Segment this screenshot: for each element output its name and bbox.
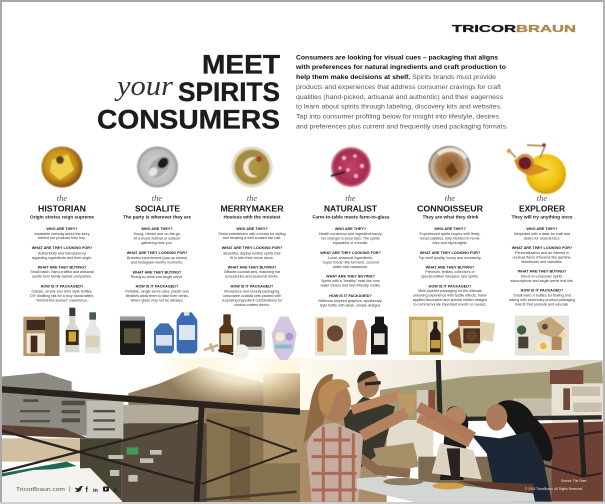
- profile text: WHAT ARE THEY LOOKING FOR?: [32, 246, 93, 250]
- profile text: flexibles allow them to take their drinks: [126, 294, 188, 298]
- icon: cocktail with ice: [428, 146, 470, 188]
- photo credit: Source: The Flare: [561, 479, 587, 483]
- product images: [204, 314, 297, 360]
- footer: website and social links: TricorBraun.com: [16, 487, 65, 493]
- profile text: Classic, ornate and retro style bottles.: [32, 289, 92, 293]
- right woman: [418, 400, 553, 502]
- profile text: WHAT ARE THEY BUYING?: [326, 274, 376, 278]
- profile text: HOW IS IT PACKAGED?: [429, 284, 472, 288]
- profile text: WHO ARE THEY?: [141, 227, 173, 231]
- panel: the naturalist: the: [345, 193, 356, 203]
- profile text: water and cardamom.: [333, 265, 368, 269]
- profile text: Insatiable curiosity about the story: [34, 232, 90, 236]
- profile text: WHAT ARE THEY LOOKING FOR?: [320, 251, 381, 255]
- profile text: WHO ARE THEY?: [526, 227, 558, 231]
- panel: the explorer: They will try anything once: [512, 214, 573, 220]
- panel: the naturalist: [312, 147, 390, 356]
- panel: the connoisseur: They are what they drink: [422, 214, 479, 220]
- profile text: WHAT ARE THEY BUYING?: [518, 270, 567, 274]
- icon: whisky swirl: [42, 146, 82, 188]
- profile text: WHAT ARE THEY BUYING?: [228, 266, 277, 270]
- profile text: accessories and seasonal drinks.: [225, 274, 279, 278]
- profile text: WHAT ARE THEY BUYING?: [426, 266, 475, 270]
- panel: the explorer: [507, 143, 575, 356]
- product images: [515, 316, 569, 356]
- profile text: Experienced spirits buyers with finely-: [420, 232, 481, 236]
- profile text: surprising ingredient combinations for: [222, 298, 283, 302]
- profile text: gathering near you.: [141, 241, 173, 245]
- profile text: Serial entertainers with a knack for styling: [218, 232, 286, 236]
- right frame edge: [603, 0, 605, 504]
- panel: the historian: the: [57, 193, 67, 203]
- profile text: equivalent of a foodie.: [333, 241, 368, 245]
- profile text: WHO ARE THEY?: [335, 227, 367, 231]
- product images: [409, 317, 495, 355]
- bottom frame edge: [0, 502, 605, 504]
- profile text: and stocking a well-curated bar cart.: [223, 236, 281, 240]
- title: SPIRITS: [178, 77, 280, 107]
- panel: the socialite: the: [152, 193, 162, 203]
- icon: youtube: [103, 486, 109, 492]
- panel: the connoisseur: CONNOISSEUR: [417, 204, 484, 214]
- intro paragraph: [295, 54, 508, 130]
- profile text: WHAT ARE THEY BUYING?: [133, 270, 182, 274]
- panel: the merrymaker: [204, 146, 297, 360]
- profile text: DIY distilling kits for a truly handcrafted,: [30, 294, 94, 298]
- intro paragraph: Tap into consumer profiling below for insight into lifestyle, desires: [296, 114, 500, 120]
- profile text: HOW IS IT PACKAGED?: [41, 284, 84, 288]
- left woman: [303, 374, 333, 443]
- panel: the naturalist: NATURALIST: [324, 204, 378, 214]
- panel: the merrymaker: MERRYMAKER: [220, 204, 284, 214]
- title: CONSUMERS: [97, 104, 280, 134]
- profile text: and Instagram-worthy moments.: [131, 260, 183, 264]
- profile text: where glass may not be allowed.: [131, 298, 183, 302]
- title: your: [114, 70, 174, 102]
- panel: the historian: Origin stories reign supreme: [30, 214, 95, 220]
- icon: cocktail from above: [232, 146, 272, 188]
- panel: the connoisseur: [409, 146, 495, 355]
- panel: the socialite: SOCIALITE: [135, 204, 180, 214]
- right side scene: [300, 360, 605, 503]
- profile text: regarding ingredients and their origin.: [32, 256, 92, 260]
- middle woman: [418, 406, 482, 480]
- photo credit: © 2018 TricorBraun. All Rights Reserved.: [525, 487, 583, 491]
- intro paragraph: products and experiences that address consumer cravings for craft: [296, 84, 501, 91]
- profile text: unboxable cocktail sets packed with: [223, 294, 281, 298]
- footer: website and social links: [16, 486, 118, 494]
- profile text: No stranger to juice bars. The spirits: [321, 236, 380, 240]
- panel: the explorer: the: [537, 193, 547, 203]
- profile text: HOW IS IT PACKAGED?: [136, 284, 179, 288]
- profile text: Direct-to-consumer spirits': [521, 274, 563, 278]
- profile text: Spirits with a "healthy" twist like rose: [321, 279, 380, 283]
- profile text: water mixers and liver-friendly vodka.: [320, 284, 381, 288]
- profile text: style bottle with sleek, simple designs.: [320, 304, 381, 308]
- profile text: tuned palettes, fully-stocked in-home: [420, 236, 480, 240]
- profile text: Giftable cocktail sets, matching bar: [224, 270, 281, 274]
- profile text: Multi-layered packaging for the ultimate: [418, 289, 482, 293]
- profile text: Premium, limited, collector's or: [425, 270, 476, 274]
- profile text: Branded experiences (pop-up stores): [127, 256, 187, 260]
- profile text: [509, 227, 575, 306]
- profile text: to commemorate important events or causes.: [413, 302, 487, 306]
- profile text: WHAT ARE THEY LOOKING FOR?: [127, 251, 188, 255]
- profile text: bars and big budgets.: [432, 241, 468, 245]
- profile text: WHO ARE THEY?: [434, 227, 466, 231]
- profile text: Ready-to-drink and single serve.: [131, 275, 183, 279]
- profile text: WHAT ARE THEY LOOKING FOR?: [222, 246, 283, 250]
- profile text: Beautiful, display-worthy spirits that: [223, 252, 281, 256]
- intro paragraph: Consumers are looking for visual cues – packaging that aligns: [296, 54, 498, 61]
- sun glow: [167, 358, 322, 405]
- profile text: custom-crafted drinks.: [234, 303, 270, 307]
- profile text: [218, 227, 286, 307]
- intro paragraph: help them make decisions at shelf. Spirits brands must provide: [296, 74, 496, 81]
- railing: [2, 389, 300, 502]
- profile text: WHAT ARE THEY LOOKING FOR?: [420, 251, 481, 255]
- icon: facebook: f: [86, 487, 88, 494]
- panel: the historian: [23, 146, 101, 356]
- profile text: Top shelf quality, luxury and exclusivity.: [418, 256, 482, 260]
- panel: the merrymaker: the: [247, 193, 257, 203]
- profile text: Small vials or bottles for trialing and: [513, 294, 571, 298]
- profile text: applied decoration and special edition designs: [413, 298, 487, 302]
- profile text: WHO ARE THEY?: [236, 227, 268, 231]
- profile text: inserts that promote and educate.: [515, 302, 569, 306]
- profile text: special edition releases; rare spirits.: [421, 274, 479, 278]
- product images: [315, 317, 388, 356]
- icon: drink garnished with cherry: [507, 143, 566, 194]
- profile text: spirits from family-owned companies.: [32, 274, 92, 278]
- profile text: HOW IS IT PACKAGED?: [231, 284, 274, 288]
- intro paragraph: with preferences for natural ingredients and craft production to: [295, 64, 506, 71]
- product images: [120, 312, 197, 355]
- sky fade: [192, 366, 207, 370]
- profile text: WHAT ARE THEY BUYING?: [38, 266, 87, 270]
- photo: friends toasting on a rooftop: [2, 358, 603, 502]
- profile text: fit in with their home decor.: [230, 256, 274, 260]
- profile text: Health-conscious and ingredient-savvy.: [319, 232, 382, 236]
- logo: TricorBraun: [452, 23, 576, 35]
- panel: the socialite: [120, 146, 197, 355]
- profile text: WHAT ARE THEY LOOKING FOR?: [512, 246, 573, 250]
- icon: drink can top: [137, 146, 178, 188]
- profile text: mixing with secondary product packaging: [509, 298, 575, 302]
- title: [97, 50, 281, 134]
- product images: [23, 308, 101, 356]
- profile text: Local, seasonal ingredients,: [328, 256, 373, 260]
- profile text: Authenticity and transparency: [38, 252, 86, 256]
- profile text: Young, vibrant and on-the-go.: [133, 232, 181, 236]
- intro paragraph: and preferences plus current and frequently used packaging formats.: [296, 123, 508, 130]
- profile text: HOW IS IT PACKAGED?: [329, 294, 373, 298]
- roof with footer space: [0, 468, 122, 502]
- intro paragraph: to learn about spirits through labeling, discovery kits and websites.: [296, 104, 502, 110]
- profile text: behind the products they buy.: [38, 236, 86, 240]
- icon: twitter: [75, 486, 83, 492]
- profile text: Wellness-inspired graphics, apothecary-: [318, 299, 384, 303]
- icon: google plus: G: [114, 488, 118, 494]
- profile text: [30, 227, 94, 302]
- profile text: unusual flavor infusions like jasmine,: [512, 256, 572, 260]
- logo: TricorBraun: TRICOR: [452, 23, 517, 35]
- glasses: [397, 393, 417, 415]
- city view left: [2, 367, 303, 503]
- panel: the connoisseur: the: [445, 193, 455, 203]
- profile text: Personalization and an interest in: [515, 251, 569, 255]
- profile text: [125, 227, 189, 302]
- panel: the historian: HISTORIAN: [38, 204, 86, 214]
- table: [357, 477, 535, 503]
- logo: TricorBraun: BRAUN: [516, 23, 576, 35]
- friends group: [300, 371, 553, 503]
- profile text: [318, 227, 384, 308]
- profile text: At a music festival or outdoor: [134, 236, 181, 240]
- icon: pomegranate drink: [331, 147, 371, 187]
- profile text: desire for experiences.: [524, 236, 560, 240]
- profile text: WHO ARE THEY?: [46, 227, 78, 231]
- profile text: HOW IS IT PACKAGED?: [521, 288, 564, 292]
- profile text: Portable, single-serve cans, plastic and: [125, 289, 189, 293]
- icon: linkedin: in: [93, 488, 99, 494]
- profile text: subscriptions and single-serve trial kits.: [510, 279, 574, 283]
- profile text: unboxing experience with tactile effects, hand-: [413, 294, 488, 298]
- front man: [307, 379, 407, 502]
- panel: the naturalist: Farm-to-table meets farm-to-glass: [312, 214, 390, 220]
- photo credit: [525, 479, 587, 491]
- profile text: elderflower and cannabis.: [521, 260, 563, 264]
- profile text: "super foods" like turmeric, coconut: [322, 260, 379, 264]
- man in back: [343, 371, 419, 473]
- title: MEET: [202, 50, 281, 80]
- panel: the explorer: EXPLORER: [519, 204, 566, 214]
- intro paragraph: qualities (hand-picked, artisanal and authentic) and their eagerness: [296, 94, 504, 101]
- profile text: [413, 227, 488, 306]
- profile text: Small batch, hand-crafted and artisanal: [30, 270, 94, 274]
- panel: the merrymaker: Hostess with the mostest: [224, 214, 281, 220]
- profile text: Showpiece and novelty packaging,: [224, 289, 280, 293]
- panel: the socialite: The party is wherever they are: [123, 214, 192, 220]
- profile text: Neophiles with a taste for craft and: [514, 232, 570, 236]
- profile text: "behind-the-scenes" experience.: [36, 298, 88, 302]
